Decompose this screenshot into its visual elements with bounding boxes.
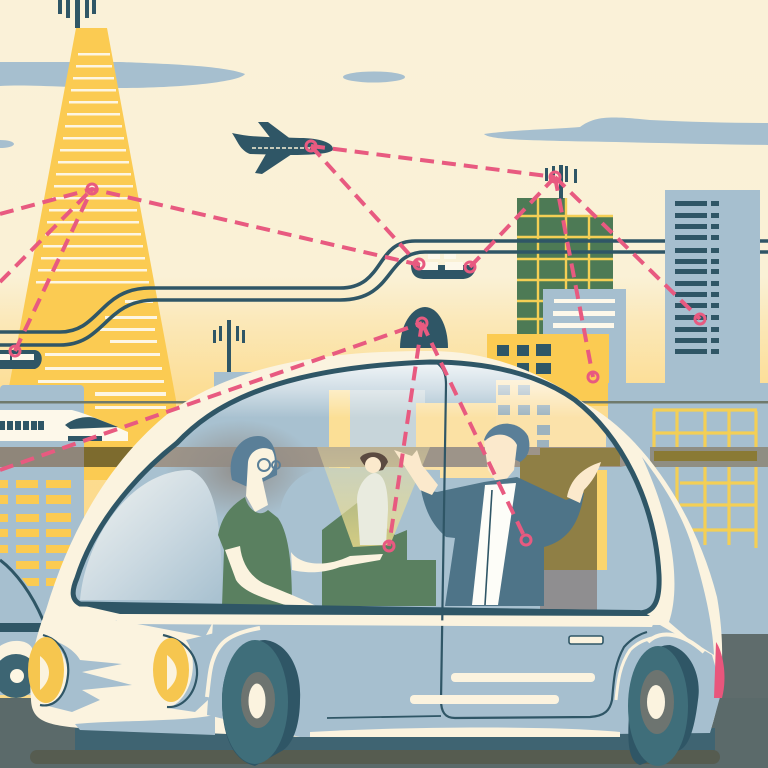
antenna: mid skyline (213, 320, 245, 372)
hair (231, 436, 277, 488)
glasses (258, 459, 280, 471)
front blue wedge (115, 620, 213, 637)
door handle (569, 636, 603, 644)
green tower with yellow grid (517, 198, 613, 335)
hologram beam (317, 447, 430, 547)
left hand and forearm (394, 450, 438, 495)
window frame (73, 362, 659, 613)
face and neck (246, 448, 275, 512)
cloud: small centre (343, 72, 405, 82)
blue around second headlight (168, 628, 235, 712)
rear body sliver (642, 457, 714, 655)
antenna: on green tower (545, 165, 577, 199)
tower with antenna (8, 0, 176, 480)
rail tracks (0, 241, 768, 345)
main autonomous car (28, 350, 724, 737)
windshield highlight (80, 470, 222, 600)
face (484, 435, 517, 487)
front wheel arch trim (207, 628, 260, 697)
right grey tower (665, 190, 760, 390)
second headlight (153, 635, 197, 707)
road (0, 634, 768, 768)
network dashed lines (0, 146, 700, 546)
woman (218, 436, 318, 607)
cloud: right (484, 118, 768, 145)
window (76, 364, 657, 610)
network nodes (10, 141, 705, 551)
arm (225, 546, 318, 607)
hologram projector box (322, 503, 436, 606)
rear wheel (628, 645, 699, 766)
hair (484, 424, 529, 462)
tail light (714, 642, 724, 698)
blue streaks by first headlight (48, 640, 132, 712)
door arch trim (616, 638, 652, 700)
rear wheel arch trim (648, 635, 704, 652)
shirt (472, 483, 516, 605)
light blue building (543, 289, 626, 400)
lower body panel (207, 622, 722, 737)
top glare (220, 364, 584, 413)
left low building with windows (0, 385, 84, 625)
centre shuttle pod (411, 254, 476, 279)
second car at left edge (0, 557, 46, 698)
window sill (76, 604, 650, 616)
woman forearm (291, 552, 383, 572)
small blue block behind car (214, 372, 274, 412)
left shuttle pod (0, 350, 42, 369)
train (0, 410, 128, 441)
hologram figure (357, 452, 388, 545)
front headlight (28, 635, 68, 705)
buildings seen through glass (329, 390, 350, 468)
front wheel (222, 640, 300, 766)
dome sensor on car roof (400, 307, 448, 348)
blue band under the front (75, 715, 215, 735)
jacket (421, 477, 584, 606)
horizon lines (0, 401, 768, 467)
airplane (232, 122, 333, 174)
right hand (567, 462, 601, 503)
right skyline base and yellow grid (608, 383, 768, 643)
green shirt (218, 497, 292, 606)
cloud: left edge sliver (0, 140, 14, 148)
antenna (58, 0, 96, 28)
yellow building (487, 334, 609, 406)
sill highlight (115, 618, 654, 627)
car body shell (30, 351, 722, 737)
door trim strips (310, 673, 620, 737)
man (394, 424, 601, 606)
door seam (437, 363, 647, 718)
cloud: upper left (0, 62, 245, 88)
